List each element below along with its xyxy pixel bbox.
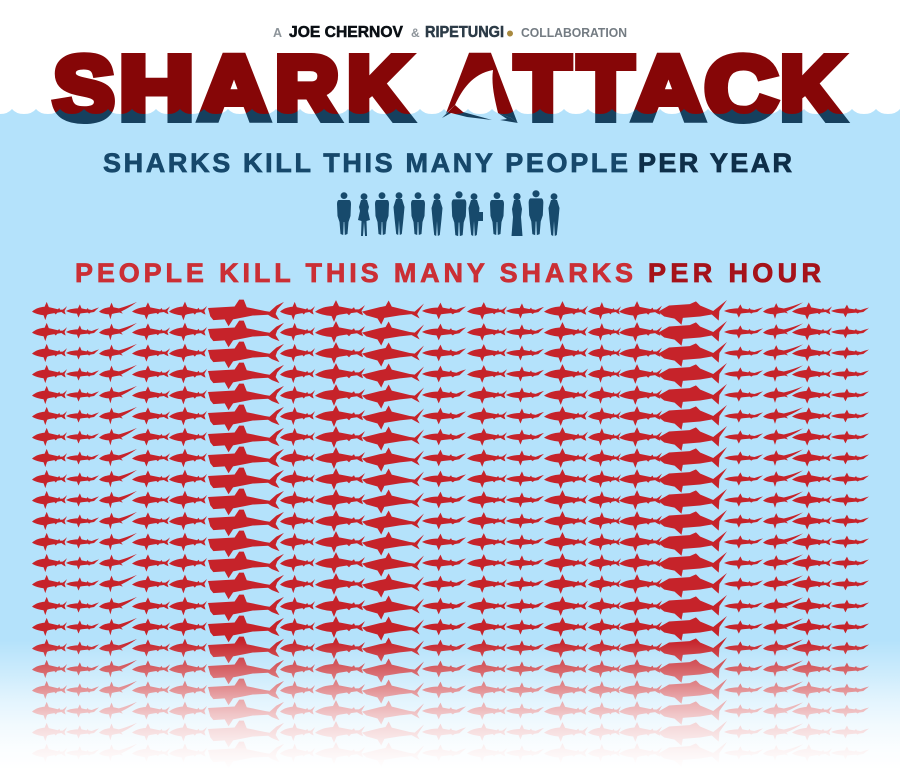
white fade at the bottom of the page: [0, 640, 900, 770]
heading: people kill sharks per hour: PEOPLE KILL THIS MANY SHARKS: [75, 258, 633, 288]
credits line: A: [273, 26, 282, 40]
icon: shark fin base slivers: [442, 105, 518, 123]
credits line: &: [411, 26, 420, 40]
title: shark attack: C: [705, 39, 778, 139]
title: shark attack: A: [446, 39, 514, 139]
title: shark attack: S: [53, 39, 114, 139]
icon row: twelve people silhouettes: [337, 190, 560, 236]
heading: sharks kill people per year: PER YEAR: [638, 148, 792, 178]
title: shark attack: A: [633, 39, 704, 139]
credits line: COLLABORATION: [521, 26, 627, 40]
heading: people kill sharks per hour: PER HOUR: [648, 258, 821, 288]
title: shark attack: A: [199, 39, 269, 139]
title: shark attack: R: [275, 39, 339, 139]
title: shark attack: T: [578, 39, 633, 139]
title: shark attack: T: [515, 39, 570, 139]
title: shark attack: [53, 39, 843, 139]
title: shark attack: K: [780, 39, 843, 139]
icon: shark fin cut into the letter A: [436, 70, 522, 131]
heading: sharks kill people per year: SHARKS KILL THIS MANY PEOPLE: [103, 148, 628, 178]
credits line: RIPETUNGI: [425, 24, 504, 41]
credits line: JOE CHERNOV: [289, 24, 404, 41]
title: shark attack: K: [347, 39, 410, 139]
shark grid: rows of shark silhouettes: [32, 300, 869, 768]
title: shark attack: H: [119, 39, 194, 139]
credits line: [273, 24, 627, 41]
